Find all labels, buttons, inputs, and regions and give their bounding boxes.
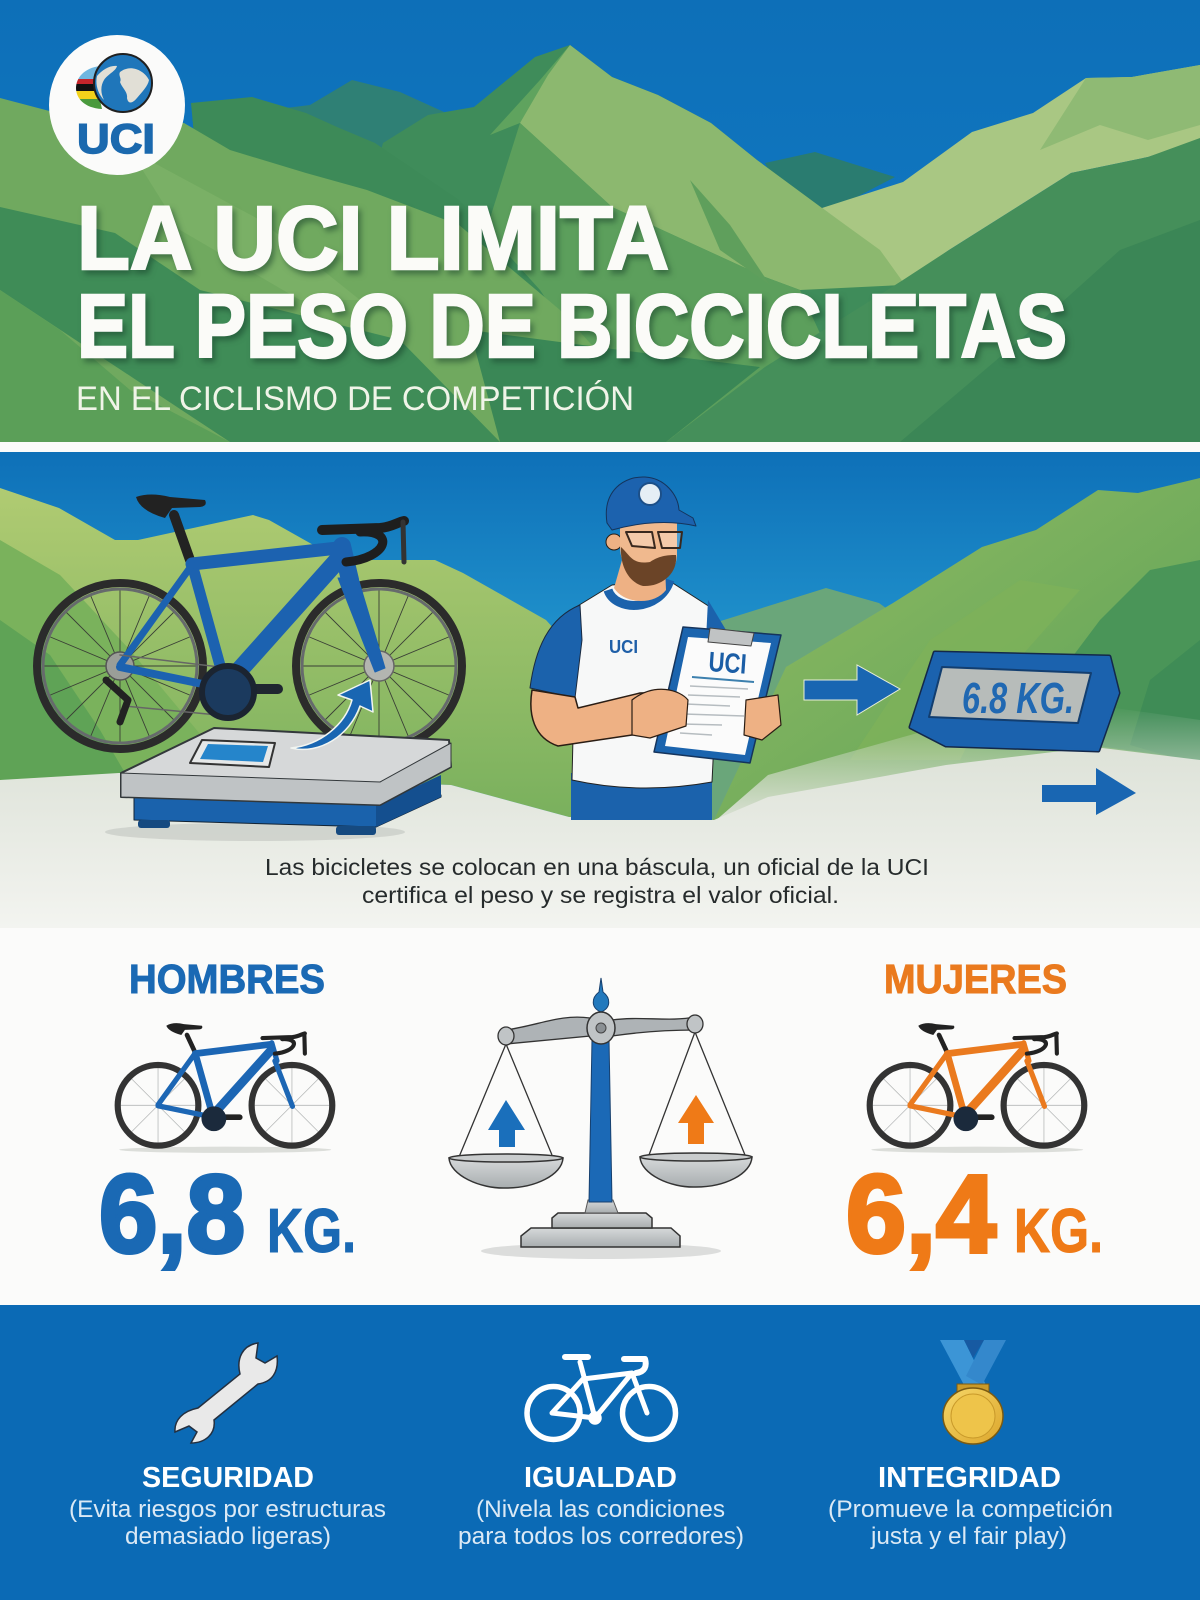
value: women limit: 6,4 xyxy=(846,1153,996,1276)
arrow: to readout xyxy=(804,665,900,715)
front wheel xyxy=(296,583,462,749)
text: seguridad xyxy=(69,1462,386,1550)
value: men limit xyxy=(99,1153,356,1276)
readout value: 6.8 KG. xyxy=(962,674,1074,723)
value: women limit xyxy=(846,1153,1103,1276)
panel: weight limits xyxy=(0,928,1200,1305)
panel: reasons xyxy=(0,1305,1200,1600)
value: women limit: KG. xyxy=(1014,1197,1103,1266)
icon: bicycle xyxy=(527,1357,676,1440)
text: seguridad: demasiado ligeras) xyxy=(125,1523,331,1550)
value: men limit: KG. xyxy=(267,1197,356,1266)
frame xyxy=(106,515,404,722)
icon: medal xyxy=(940,1340,1006,1444)
icon: wrench xyxy=(175,1343,277,1443)
illustration: platform scale xyxy=(105,680,451,841)
blue up arrow xyxy=(488,1100,525,1147)
crankset xyxy=(202,666,254,718)
text: igualdad: para todos los corredores) xyxy=(458,1523,744,1550)
left pan xyxy=(449,1158,563,1188)
value: men limit: 6,8 xyxy=(99,1153,245,1276)
text: integridad xyxy=(828,1462,1113,1550)
process description: certifica el peso y se registra el valor oficial. xyxy=(362,882,839,908)
icon: balance scale xyxy=(449,978,752,1259)
text: integridad: (Promueve la competición xyxy=(828,1496,1113,1523)
heading: hombres: HOMBRES xyxy=(129,956,325,1002)
icon: digital readout xyxy=(911,653,1118,750)
illustration: UCI official xyxy=(530,477,781,820)
icon: blue bike xyxy=(118,1023,332,1153)
text: integridad: INTEGRIDAD xyxy=(878,1462,1061,1494)
saddle xyxy=(136,494,206,518)
subtitle: EN EL CICLISMO DE COMPETICIÓN xyxy=(76,380,634,418)
process description: Las bicicletes se colocan en una báscula, un oficial de la UCI xyxy=(265,854,929,880)
text: seguridad: (Evita riesgos por estructuras xyxy=(69,1496,386,1523)
arrow: curved up xyxy=(291,680,373,749)
text: igualdad xyxy=(458,1462,744,1550)
icon: orange bike xyxy=(870,1023,1084,1153)
process description xyxy=(265,854,929,908)
text: igualdad: IGUALDAD xyxy=(524,1462,677,1494)
panel: header with mountains xyxy=(0,0,1200,442)
panel: weighing process xyxy=(0,452,1200,928)
text: integridad: justa y el fair play) xyxy=(870,1523,1067,1550)
heading: mujeres: MUJERES xyxy=(884,956,1067,1002)
rear wheel xyxy=(37,583,203,749)
title: LA UCI LIMITA xyxy=(77,189,669,289)
right pan xyxy=(640,1157,752,1187)
hands xyxy=(632,689,688,738)
logo wordmark: UCI xyxy=(77,115,155,162)
arrow: next step xyxy=(1042,768,1136,815)
text: igualdad: (Nivela las condiciones xyxy=(476,1496,725,1523)
illustration: road bike on scale xyxy=(37,494,462,749)
clipboard xyxy=(654,627,781,763)
clipboard: UCI xyxy=(708,646,748,680)
shirt logo: UCI xyxy=(609,637,638,657)
logo: UCI badge xyxy=(49,35,185,175)
scale readout xyxy=(190,740,275,767)
title xyxy=(77,189,1067,377)
text: seguridad: SEGURIDAD xyxy=(142,1462,314,1494)
orange up arrow xyxy=(678,1095,714,1144)
head xyxy=(606,534,622,550)
